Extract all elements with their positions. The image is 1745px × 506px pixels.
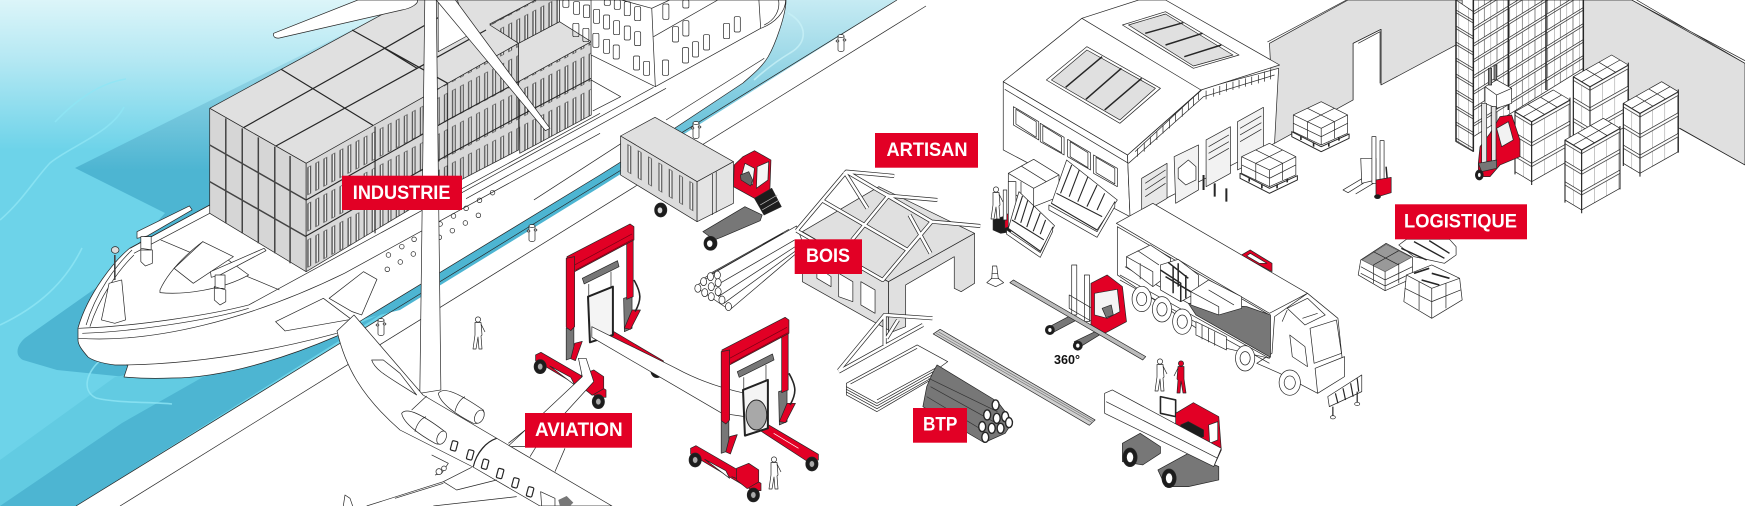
dark steps — [754, 188, 781, 215]
rack uprights — [1456, 0, 1583, 152]
label: AVIATION: AVIATION — [535, 419, 623, 441]
label: BOIS — [795, 239, 862, 274]
pedestrian stacker — [1343, 137, 1391, 199]
front forklift cab — [1176, 403, 1221, 467]
rear wheel — [655, 203, 667, 217]
360 degrees text: 360° — [1054, 353, 1080, 367]
logistics pallet wrapped — [1404, 265, 1462, 318]
label: BTP — [913, 408, 967, 443]
forklift body — [993, 217, 1011, 233]
house far wall — [888, 233, 975, 333]
container door faces — [210, 108, 306, 272]
house under construction — [797, 172, 1095, 443]
lower dark water — [0, 312, 385, 506]
container row lines — [306, 120, 448, 236]
red item behind truck — [1242, 250, 1272, 272]
label: BTP: BTP — [923, 414, 957, 436]
cab windows — [1181, 422, 1204, 440]
container handler — [621, 117, 781, 250]
label: BOIS: BOIS — [806, 245, 850, 267]
trailer side rail — [1120, 267, 1269, 363]
pallet of boxes 1 — [1292, 102, 1349, 152]
bow deck equipment — [101, 206, 266, 323]
front wheel — [704, 236, 717, 250]
cab seat — [740, 172, 753, 186]
warehouse doors — [1142, 163, 1167, 213]
high rack warehouse — [1456, 0, 1678, 213]
roof truss — [797, 172, 980, 280]
house windows — [817, 267, 875, 313]
glass rack forklift — [993, 159, 1117, 257]
rear container sides — [519, 42, 591, 153]
airplane windows — [450, 440, 534, 497]
traffic cone — [987, 266, 1004, 287]
warehouse — [1003, 0, 1280, 217]
front gantry crane — [689, 317, 818, 502]
timber ends — [695, 271, 732, 311]
mast — [1069, 265, 1092, 322]
long beam — [1010, 280, 1146, 360]
shelf unit right — [1623, 82, 1678, 177]
airplane fuselage — [337, 315, 612, 506]
two people shaking hands — [1155, 359, 1186, 393]
cab — [1257, 293, 1343, 393]
containers on ship — [210, 0, 591, 272]
timber pile — [695, 226, 804, 311]
label: INDUSTRIE: INDUSTRIE — [353, 182, 450, 204]
engine rear — [438, 391, 484, 424]
wall box — [1178, 160, 1196, 185]
portholes — [385, 190, 495, 272]
person on quay — [473, 317, 485, 349]
sheet stack — [846, 345, 948, 412]
shelf unit back — [1573, 55, 1628, 150]
back stack sides — [448, 43, 519, 187]
mast — [1003, 182, 1016, 227]
trailer floor — [1188, 303, 1270, 357]
forklift 360 — [1010, 265, 1146, 360]
container side — [621, 136, 697, 222]
bollards on quay — [376, 34, 846, 336]
front forklift with pipes — [1105, 390, 1221, 488]
gantry crane and beam — [534, 224, 818, 502]
container tops — [210, 0, 536, 163]
ship hull — [78, 0, 786, 378]
red cab — [733, 151, 771, 198]
pipe ends — [979, 400, 1012, 442]
rear gantry crane — [534, 224, 663, 409]
white pipes — [1105, 390, 1221, 467]
engine front — [402, 411, 446, 444]
landing gear — [432, 455, 448, 475]
cladding stripes — [1138, 70, 1270, 157]
wind turbine — [273, 0, 550, 393]
trailer wheels — [1132, 286, 1300, 395]
cargo pallet 1 — [1126, 245, 1171, 287]
label: INDUSTRIE — [342, 176, 462, 210]
wheels — [1123, 448, 1176, 488]
quay and waterfront lines — [76, 0, 926, 506]
shelf unit left — [1515, 90, 1570, 185]
driver by glass rack — [991, 187, 1003, 219]
stacked boxes — [1008, 159, 1059, 207]
right fork box — [1158, 453, 1219, 487]
grey pipes — [923, 365, 1013, 443]
lower water band — [0, 335, 330, 506]
warehouse roof — [1003, 0, 1280, 155]
turbine blade left — [273, 0, 417, 38]
pallets in yard — [1240, 102, 1462, 318]
road barrier — [1328, 375, 1362, 419]
warehouse left wall — [1003, 82, 1130, 217]
container top — [621, 117, 733, 182]
house roof deck — [802, 187, 975, 282]
house near wall — [802, 240, 888, 330]
airplane details — [343, 360, 573, 506]
trailer roof — [1116, 203, 1308, 313]
warehouse back walls — [1267, 0, 1462, 143]
logistics empty pallets — [1399, 239, 1456, 263]
left skylight — [1046, 47, 1160, 123]
label: ARTISAN — [875, 133, 978, 168]
front forklift mast — [1160, 397, 1176, 417]
person near crane — [769, 457, 781, 489]
label: LOGISTIQUE: LOGISTIQUE — [1404, 210, 1517, 232]
glass rack front — [1007, 192, 1054, 257]
warehouse right wall — [1127, 68, 1279, 217]
turbine tower — [420, 0, 441, 393]
truck — [1116, 203, 1345, 395]
loose truss — [839, 315, 932, 372]
label: ARTISAN: ARTISAN — [886, 139, 968, 161]
airplane far wing — [508, 358, 594, 447]
transported beam — [592, 327, 745, 417]
large rack right face — [1473, 0, 1583, 137]
bollard posts — [1204, 175, 1226, 202]
trailer interior — [1117, 227, 1269, 358]
glass racks rear — [1049, 160, 1117, 237]
rear row line — [519, 78, 591, 117]
warehouse windows — [1013, 107, 1117, 187]
label: AVIATION — [525, 413, 632, 448]
fork deck — [703, 207, 762, 240]
reach truck — [1475, 65, 1520, 180]
upper container side — [490, 0, 560, 43]
pallet of boxes 2 — [1240, 143, 1297, 193]
label: LOGISTIQUE — [1395, 204, 1527, 239]
rear container top — [519, 22, 591, 82]
water — [0, 0, 897, 506]
airplane — [276, 272, 612, 506]
water ripples — [0, 13, 803, 404]
airplane tail fin — [276, 272, 377, 331]
right skylight — [1122, 12, 1239, 68]
shelf unit front — [1565, 118, 1620, 213]
door panel lines — [210, 118, 306, 263]
cab window — [1095, 289, 1120, 318]
container top seams — [242, 10, 486, 147]
hull crease lines — [78, 113, 600, 365]
red cab — [1091, 275, 1126, 333]
fork legs — [1046, 315, 1077, 333]
round load — [746, 400, 767, 430]
red accent — [1005, 213, 1010, 228]
cab window left — [741, 163, 754, 185]
warehouse right wall — [1583, 0, 1745, 165]
superstructure windows — [563, 0, 740, 75]
left fork box — [1122, 433, 1160, 465]
dark water shadow — [17, 0, 897, 377]
long container sides — [306, 83, 448, 272]
back stack row lines — [448, 82, 519, 155]
logistics pallet grey — [1358, 243, 1412, 291]
long metal profile — [933, 329, 1095, 425]
large rack left face — [1456, 0, 1473, 152]
turbine blade right — [436, 0, 550, 131]
container end — [697, 162, 733, 222]
ship superstructure — [461, 0, 786, 200]
trailer toolbox — [1196, 322, 1226, 350]
cab window right — [756, 162, 769, 188]
cargo pallet 2 — [1191, 280, 1242, 315]
cargo crate — [1160, 259, 1198, 302]
